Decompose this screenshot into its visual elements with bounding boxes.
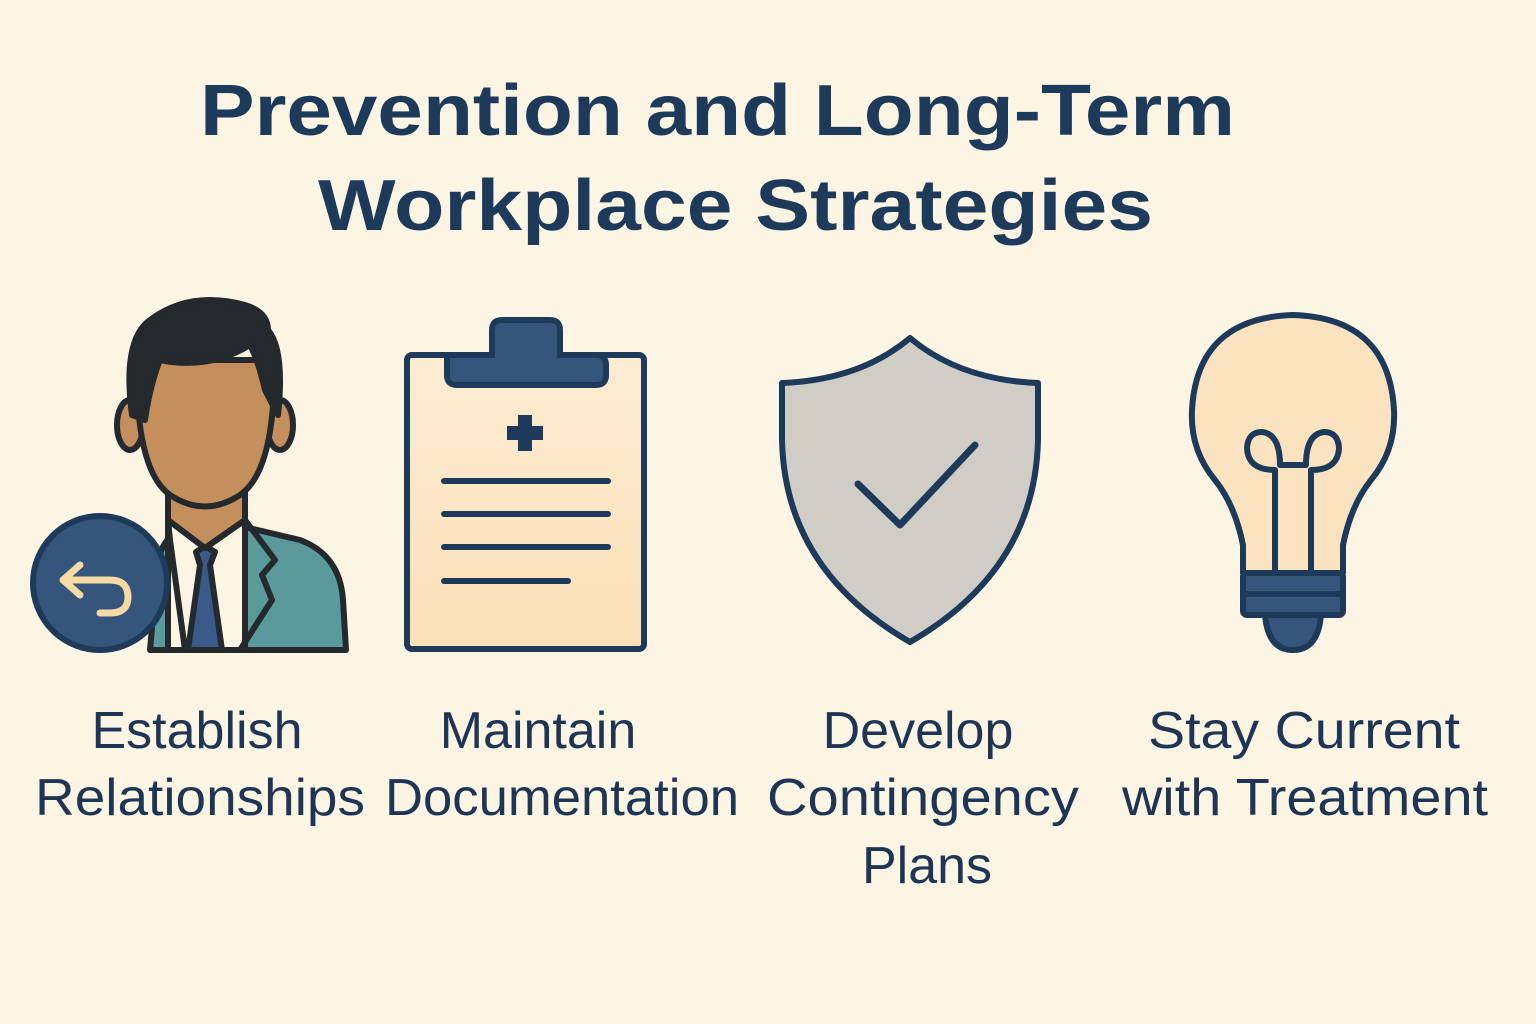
label: develop contingency plans: Develop (823, 702, 1013, 760)
label: develop contingency plans: Contingency (767, 769, 1079, 827)
neck (168, 490, 245, 548)
icon: light bulb (1192, 315, 1394, 650)
title: Workplace Strategies (318, 166, 1153, 246)
label: stay current with treatment: Stay Current (1148, 702, 1461, 760)
suit (150, 520, 346, 650)
label: stay current with treatment (1121, 702, 1489, 827)
icon: shield with check (782, 338, 1038, 642)
label: maintain documentation: Maintain (440, 702, 636, 760)
label: develop contingency plans: Plans (862, 837, 992, 895)
icon: person with return badge (117, 300, 346, 650)
label: maintain documentation (385, 702, 739, 827)
labels (35, 702, 1489, 895)
label: maintain documentation: Documentation (385, 769, 739, 827)
title (200, 71, 1235, 246)
hair (129, 300, 280, 420)
label: establish relationships: Relationships (35, 769, 365, 827)
title: Prevention and Long-Term (200, 71, 1235, 151)
badge circle (33, 516, 167, 650)
label: stay current with treatment: with Treatment (1121, 769, 1489, 827)
ears (117, 400, 143, 450)
label: establish relationships (35, 702, 365, 827)
label: develop contingency plans (767, 702, 1079, 895)
icon: clipboard (407, 320, 644, 649)
face (137, 360, 274, 506)
label: establish relationships: Establish (92, 702, 302, 760)
